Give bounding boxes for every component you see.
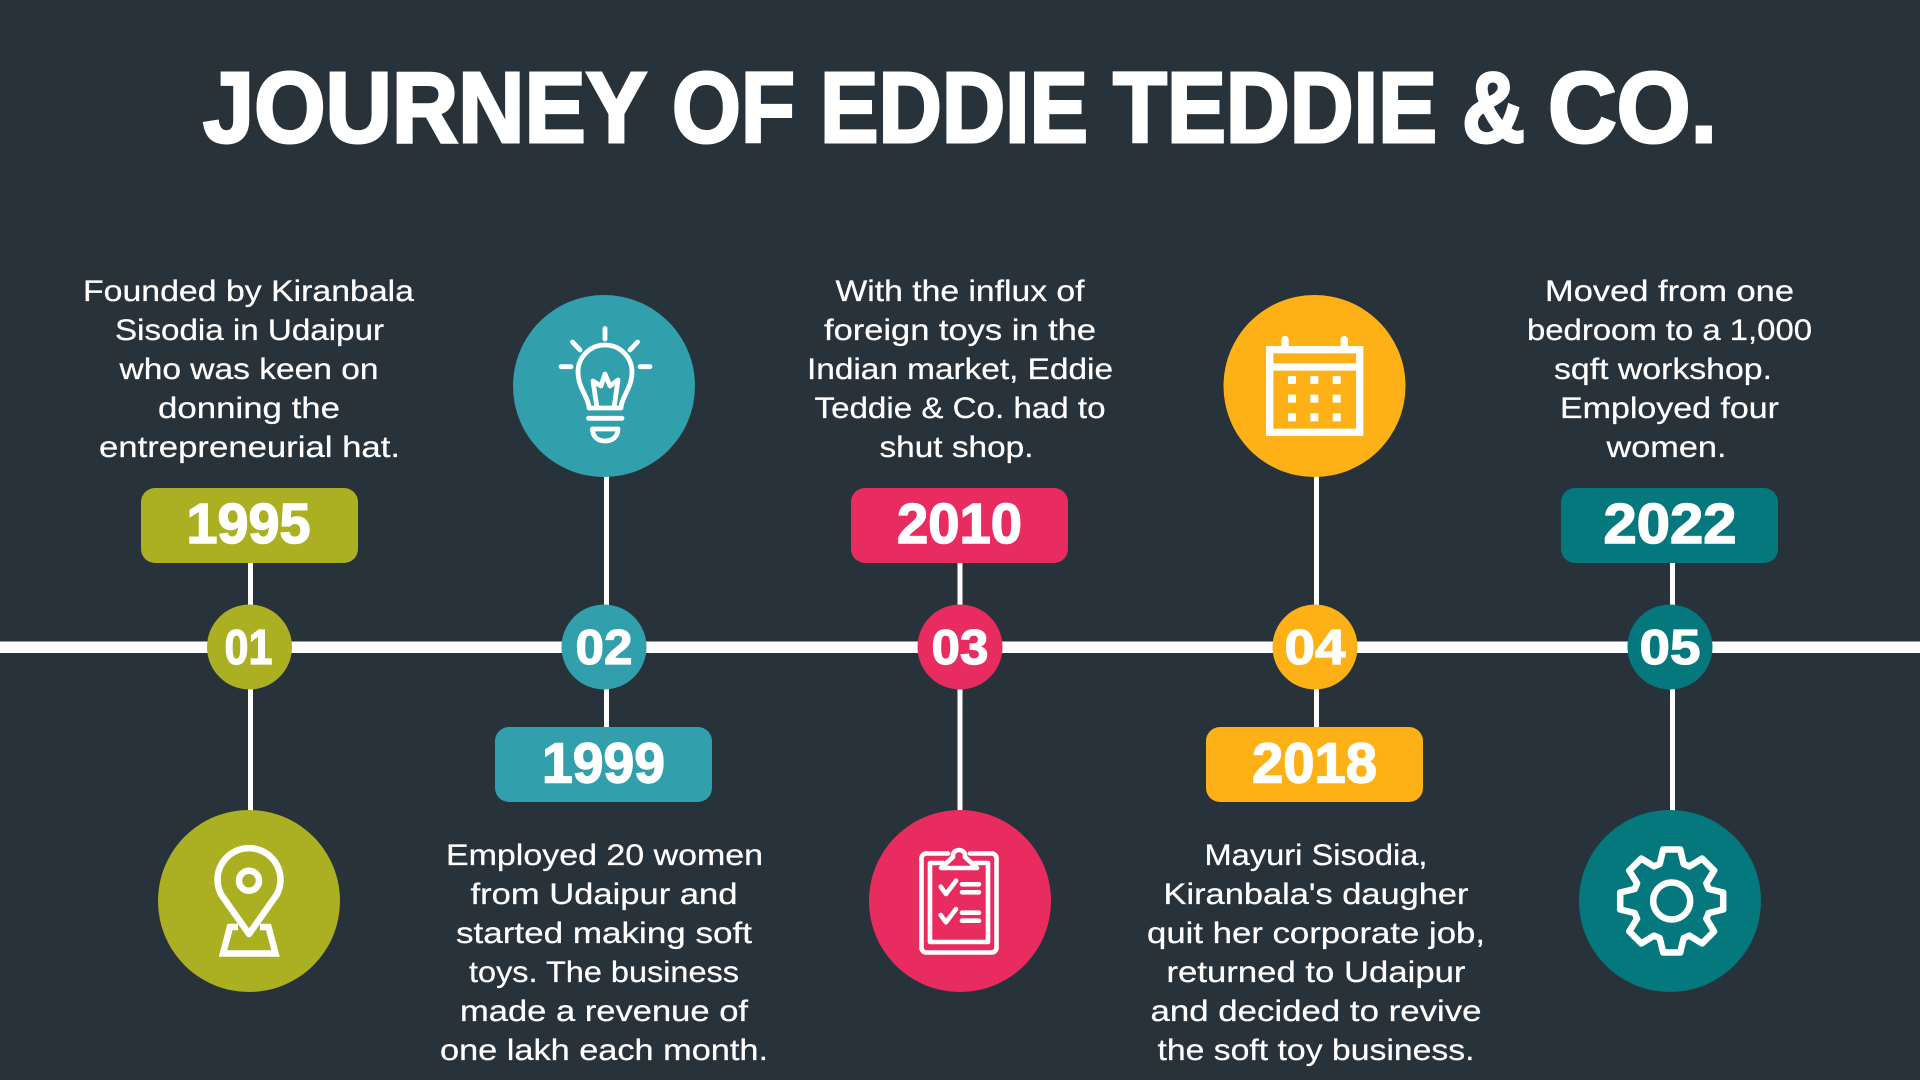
text block: 1995 description: Founded by Kiranbala [83, 275, 414, 308]
text block: 2018 description: the soft toy business. [1158, 1034, 1474, 1067]
year badge 2022 [1561, 488, 1778, 563]
connector stem [248, 560, 253, 815]
text block: 2010 description: Teddie & Co. had to [814, 392, 1106, 425]
text block: 1999 description [440, 839, 768, 1067]
year badge 1995 [141, 488, 358, 563]
connector stem [1314, 470, 1319, 730]
node 01 [207, 604, 292, 690]
text block: 2010 description: With the influx of [836, 275, 1085, 308]
title: OF [672, 52, 795, 164]
text block: 2010 description: Indian market, Eddie [807, 353, 1113, 386]
text block: 2018 description: and decided to revive [1150, 995, 1482, 1028]
year badge 2018: 2018 [1252, 732, 1377, 796]
text block: 2018 description: Mayuri Sisodia, [1204, 839, 1428, 872]
text block: 2010 description: shut shop. [880, 431, 1034, 464]
text block: 2018 description: returned to Udaipur [1166, 956, 1466, 989]
icon: clipboard checklist [869, 810, 1051, 992]
text block: 2018 description [1147, 839, 1485, 1067]
year badge 2010: 2010 [897, 492, 1022, 556]
text block: 2018 description: quit her corporate job, [1147, 917, 1485, 950]
year badge 2010 [851, 488, 1068, 563]
text block: 1995 description: donning the [158, 392, 340, 425]
title: TEDDIE [1113, 52, 1437, 164]
node 03: 03 [932, 621, 988, 675]
node 02 [562, 604, 646, 690]
text block: 1999 description: Employed 20 women [446, 839, 763, 872]
panel: milestone 04, 2018 [1147, 295, 1485, 1067]
node 05: 05 [1640, 621, 1700, 675]
connector stem [1670, 560, 1675, 815]
node 04: 04 [1284, 621, 1346, 675]
text block: 2010 description: foreign toys in the [824, 314, 1096, 347]
text block: 2010 description [807, 275, 1113, 464]
year badge 1995: 1995 [186, 492, 310, 556]
year badge 2022: 2022 [1604, 492, 1736, 556]
panel: milestone 01, 1995 [83, 275, 414, 992]
text block: 1995 description [83, 275, 414, 464]
text block: 2022 description [1527, 275, 1812, 464]
icon: gear [1579, 810, 1761, 992]
node 01: 01 [224, 621, 272, 675]
title: CO. [1548, 52, 1717, 164]
node 02: 02 [576, 621, 632, 675]
icon: calendar [1224, 295, 1406, 477]
text block: 2022 description: women. [1605, 431, 1726, 464]
node 05 [1628, 604, 1712, 690]
text block: 1995 description: Sisodia in Udaipur [115, 314, 384, 347]
text block: 1999 description: made a revenue of [460, 995, 749, 1028]
node 04 [1272, 604, 1358, 690]
connector stem [958, 560, 962, 815]
timeline axis [0, 642, 1920, 653]
text block: 1995 description: who was keen on [118, 353, 378, 386]
text block: 1999 description: toys. The business [469, 956, 739, 989]
icon: map pin [158, 810, 340, 992]
panel: milestone 03, 2010 [807, 275, 1113, 992]
text block: 2018 description: Kiranbala's daugher [1164, 878, 1469, 911]
text block: 2022 description: Moved from one [1545, 275, 1794, 308]
year badge 2018 [1206, 727, 1423, 802]
text block: 2022 description: Employed four [1560, 392, 1779, 425]
title: JOURNEY [203, 52, 647, 164]
year badge 1999: 1999 [542, 732, 665, 796]
title: & [1462, 52, 1525, 164]
year badge 1999 [495, 727, 712, 802]
text block: 1999 description: started making soft [456, 917, 753, 950]
title: EDDIE [820, 52, 1088, 164]
text block: 1999 description: one lakh each month. [440, 1034, 768, 1067]
title [203, 52, 1717, 164]
text block: 1999 description: from Udaipur and [470, 878, 738, 911]
text block: 1995 description: entrepreneurial hat. [99, 431, 400, 464]
icon: light bulb [513, 295, 695, 477]
text block: 2022 description: bedroom to a 1,000 [1527, 314, 1812, 347]
connector stem [604, 470, 609, 730]
panel: milestone 05, 2022 [1527, 275, 1812, 992]
panel: milestone 02, 1999 [440, 295, 768, 1067]
text block: 2022 description: sqft workshop. [1554, 353, 1772, 386]
node 03 [918, 604, 1002, 690]
